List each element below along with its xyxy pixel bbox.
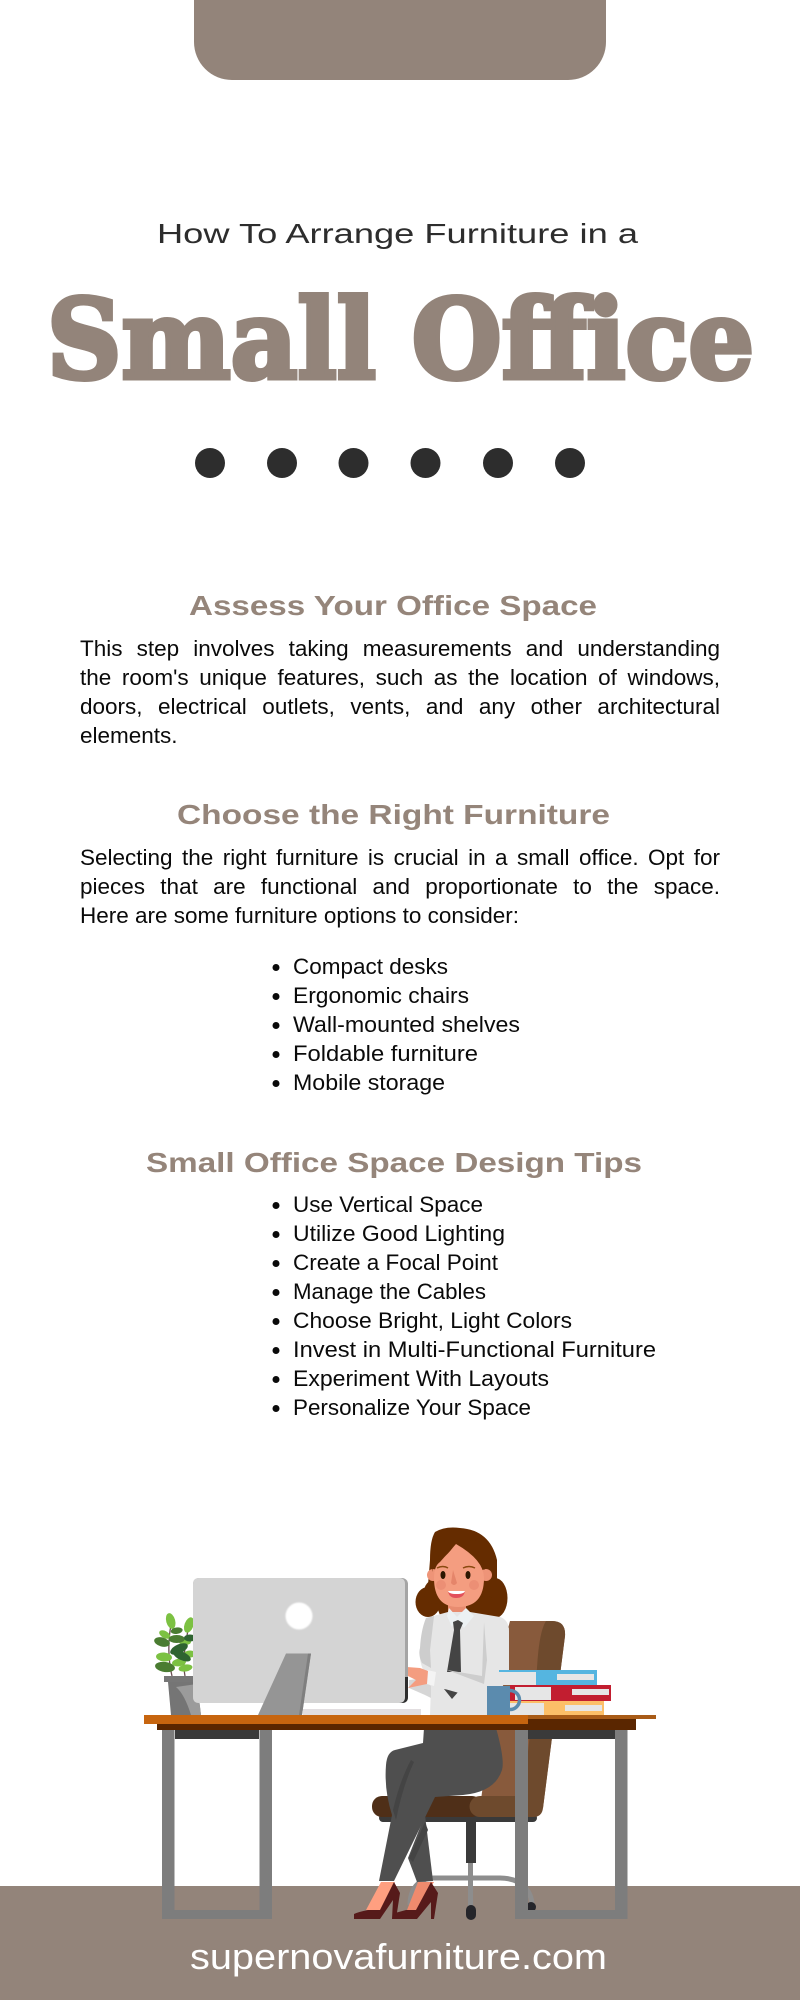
- desk: [144, 1715, 656, 1919]
- paragraph: assess: the room's unique features, such as the location of windows,: [80, 665, 720, 690]
- tips list: Utilize Good Lighting: [293, 1221, 505, 1246]
- paragraph: assess: [80, 636, 720, 748]
- website url: supernovafurniture.com: [190, 1936, 607, 1977]
- top tab: [194, 0, 606, 80]
- tips list: Choose Bright, Light Colors: [293, 1308, 572, 1333]
- footer band: [0, 1886, 800, 2000]
- paragraph: choose: [80, 845, 720, 928]
- tips list: Invest in Multi-Functional Furniture: [293, 1337, 656, 1362]
- left foot: [366, 1882, 395, 1910]
- paragraph: choose: Here are some furniture options to consider:: [80, 903, 519, 928]
- tips list: Experiment With Layouts: [293, 1366, 549, 1391]
- furniture list: Compact desks: [293, 954, 448, 979]
- office illustration: [144, 1528, 656, 1920]
- heading: assess: Assess Your Office Space: [189, 590, 597, 621]
- heading: choose: Choose the Right Furniture: [177, 799, 610, 830]
- books: [499, 1670, 611, 1715]
- title: Small Office: [47, 275, 754, 404]
- furniture list: Ergonomic chairs: [293, 983, 469, 1008]
- furniture list: [272, 954, 520, 1095]
- woman: [354, 1528, 509, 1919]
- furniture list: Mobile storage: [293, 1070, 445, 1095]
- tips list: Create a Focal Point: [293, 1250, 498, 1275]
- tips list: [272, 1192, 656, 1420]
- office chair: [372, 1621, 565, 1920]
- tips list: Use Vertical Space: [293, 1192, 483, 1217]
- shoes: [354, 1882, 438, 1919]
- keyboard: [303, 1709, 421, 1715]
- heading: tips: Small Office Space Design Tips: [146, 1147, 642, 1178]
- subtitle: How To Arrange Furniture in a: [157, 218, 639, 249]
- monitor: [193, 1578, 408, 1715]
- tips list: Manage the Cables: [293, 1279, 486, 1304]
- neck: [448, 1600, 466, 1625]
- collar: [447, 1608, 474, 1628]
- hair back: [416, 1528, 508, 1618]
- mug: [487, 1686, 520, 1715]
- tips list: Personalize Your Space: [293, 1395, 531, 1420]
- plant: [153, 1612, 201, 1715]
- paragraph: assess: This step involves taking measurements and understanding: [80, 636, 720, 661]
- right foot: [407, 1882, 434, 1910]
- trousers: [408, 1815, 433, 1882]
- paragraph: assess: elements.: [80, 723, 178, 748]
- paragraph: choose: Selecting the right furniture is crucial in a small office. Opt for: [80, 845, 720, 870]
- paragraph: assess: doors, electrical outlets, vents, and any other architectural: [80, 694, 720, 719]
- arm: [427, 1617, 509, 1700]
- furniture list: Foldable furniture: [293, 1041, 478, 1066]
- hand: [407, 1667, 428, 1688]
- dot row: [195, 448, 585, 478]
- shirt: [420, 1612, 509, 1715]
- face: [427, 1540, 492, 1607]
- tie: [444, 1620, 463, 1699]
- paragraph: choose: pieces that are functional and proportionate to the space.: [80, 874, 720, 899]
- furniture list: Wall-mounted shelves: [293, 1012, 520, 1037]
